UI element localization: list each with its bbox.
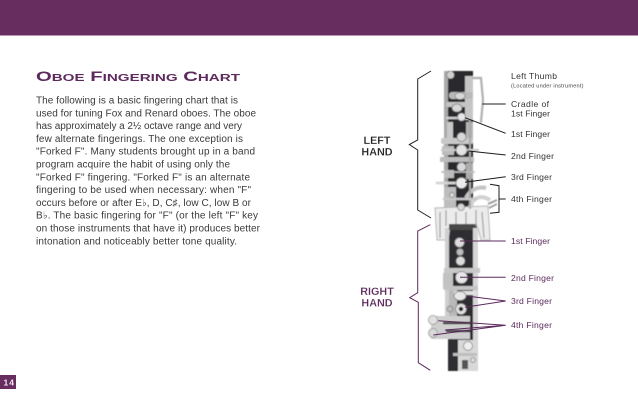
body text: intonation and noticeably better tone quality. <box>36 236 237 247</box>
lower joint body <box>448 226 477 371</box>
body text: used for tuning Fox and Renard oboes. The oboe <box>36 108 256 119</box>
left hand finger labels: Cradle of <box>511 99 550 109</box>
right hand label: HAND <box>361 298 393 310</box>
page number tab: 14 <box>4 378 15 388</box>
left hand finger labels: (Located under instrument) <box>511 84 584 90</box>
upper tone holes and finger keys <box>447 71 467 210</box>
lower finger keys <box>447 238 476 362</box>
body text: fingering to be used when necessary: when "F" <box>36 185 251 196</box>
upper side rods <box>437 78 483 208</box>
left hand finger labels: 2nd Finger <box>511 151 554 161</box>
right hand finger labels <box>511 236 554 330</box>
body text: program acquire the habit of using only the <box>36 160 230 170</box>
oboe illustration <box>428 71 497 371</box>
right hand label <box>360 286 394 310</box>
body text: "Forked F". Many students brought up in a band <box>36 147 255 158</box>
body text: few alternate fingerings. The one exception is <box>36 134 243 145</box>
page number tab <box>0 375 16 389</box>
right hand finger labels: 2nd Finger <box>511 273 554 283</box>
right hand finger labels: 4th Finger <box>511 320 552 330</box>
left hand brace <box>409 71 431 218</box>
left hand finger labels <box>511 71 584 204</box>
right hand brace <box>410 225 430 370</box>
left hand label <box>361 135 393 158</box>
body text: The following is a basic fingering chart that is <box>36 96 238 106</box>
body text: on those instruments that have it) produces better <box>36 224 261 234</box>
left hand finger labels: 1st Finger <box>511 129 550 139</box>
left hand finger labels: 4th Finger <box>511 194 552 204</box>
left hand label: HAND <box>361 146 393 158</box>
left hand finger labels: Left Thumb <box>511 71 557 81</box>
body text <box>36 96 261 247</box>
top banner <box>0 0 638 36</box>
low key cluster <box>428 316 470 339</box>
left hand finger labels: 1st Finger <box>511 108 550 118</box>
left hand leader lines <box>465 104 506 213</box>
body text: "Forked F" fingering. "Forked F" is an alternate <box>36 172 250 183</box>
upper joint body <box>445 71 473 209</box>
left hand finger labels: 3rd Finger <box>511 172 552 182</box>
body text: B♭. The basic fingering for "F" (or the left "F" key <box>36 211 258 222</box>
right hand leader lines <box>433 241 506 335</box>
silver mechanism on upper joint <box>440 71 474 209</box>
right hand finger labels: 1st Finger <box>511 236 550 246</box>
left hand label: LEFT <box>364 135 391 147</box>
body text: has approximately a 2½ octave range and very <box>36 121 242 132</box>
joint ferrule and 4th finger keys <box>435 187 497 240</box>
right hand finger labels: 3rd Finger <box>511 296 552 306</box>
right hand label: RIGHT <box>360 286 394 298</box>
body text: occurs before or after E♭, D, C♯, low C, low B or <box>36 198 252 209</box>
title: O BOE F INGERING C HART <box>36 68 241 84</box>
silver mechanism on lower joint <box>443 228 480 371</box>
